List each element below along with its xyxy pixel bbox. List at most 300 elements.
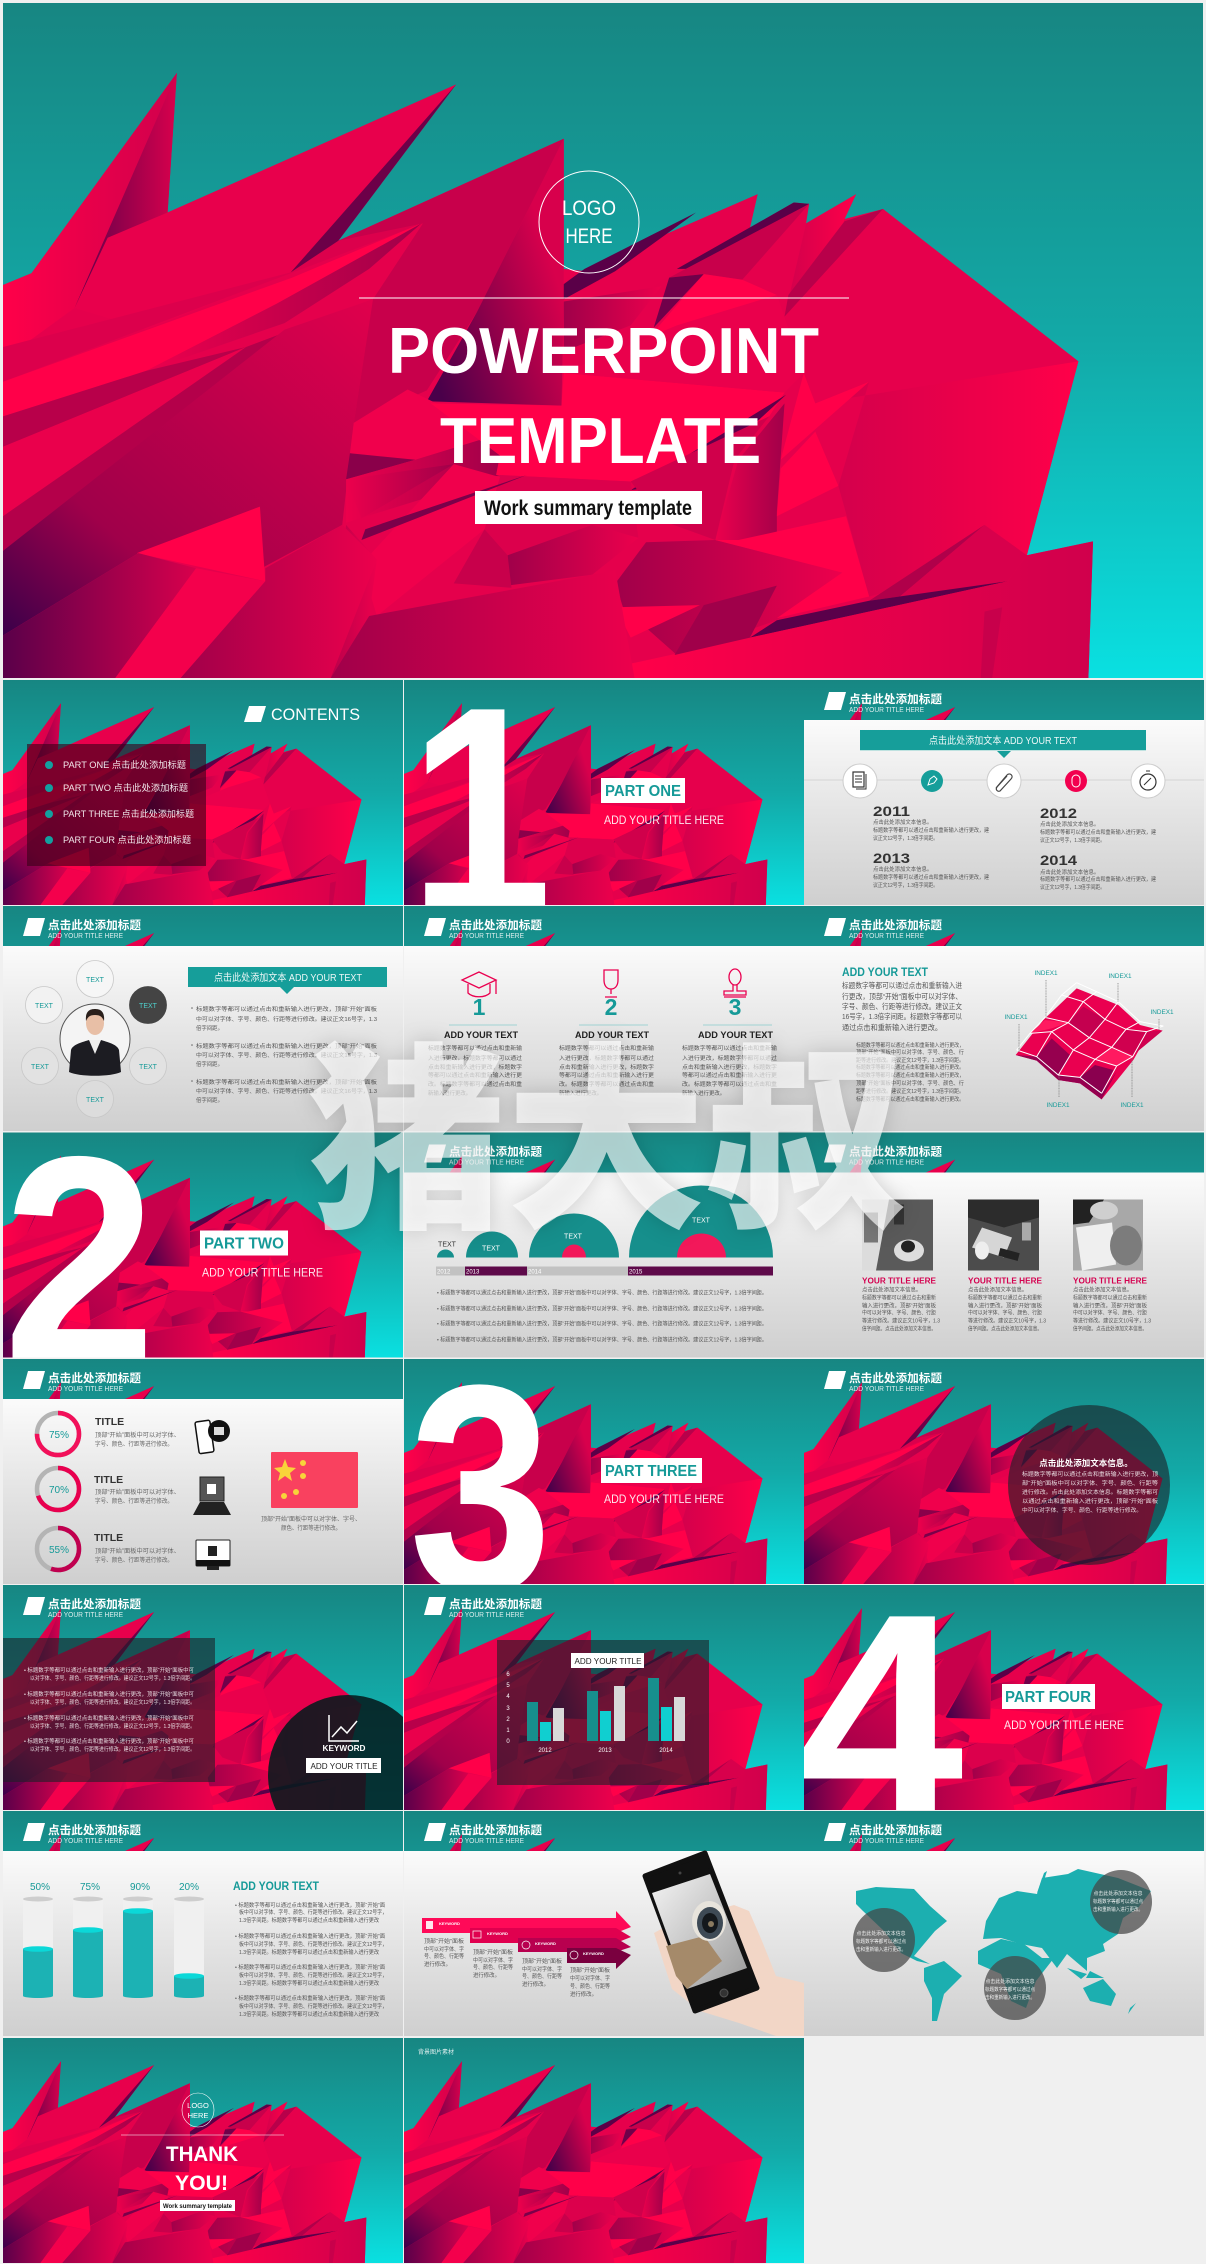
header: 点击此处添加标题	[48, 1371, 142, 1385]
photo: desk	[968, 1200, 1039, 1270]
column 1: 等都可以通过点击和重新输入进行更	[428, 1071, 523, 1079]
radar index labels: INDEX1	[1034, 970, 1058, 977]
thank you title: YOU!	[175, 2172, 228, 2195]
bar chart: 2013	[598, 1748, 612, 1754]
radar index labels: INDEX1	[1120, 1102, 1144, 1109]
photo captions: YOUR TITLE HERE	[862, 1276, 937, 1286]
icon: trophy	[604, 970, 618, 997]
step captions: 顶部“开始”面板	[522, 1957, 563, 1965]
item 1 text: 顶部“开始”面板中可以对字体、	[95, 1431, 180, 1439]
numbers: 2	[605, 994, 617, 1020]
header: ADD YOUR TITLE HERE	[449, 1838, 524, 1845]
bullet text: 顶部“开始”面板中可以对字体、字号、颜色、行	[856, 1048, 965, 1056]
2014: 标题数字等都可以通过点击和重新输入进行更改，建	[1040, 875, 1157, 883]
bullet text: 标题数字等都可以通过点击和重新输入进行更改，	[856, 1071, 964, 1079]
slide: circle text	[804, 1359, 1204, 1584]
dark circle with text: 点击此处添加文本信息。	[1039, 1458, 1133, 1468]
flag image	[271, 1452, 358, 1508]
part four label: ADD YOUR TITLE HERE	[1004, 1718, 1124, 1732]
dark circle with text: 标题数字等都可以通过点击和重新输入进行更改，顶	[1022, 1470, 1159, 1478]
map callouts: 击和重新输入进行更改。	[985, 1994, 1035, 2001]
2014: 2014	[1040, 852, 1077, 868]
column text 1: 中可以对字体、字号、颜色、行距	[862, 1308, 937, 1316]
cylinder 90%	[123, 1882, 153, 1998]
slide: contents	[3, 680, 403, 905]
column 2: 标题数字等都可以通过点击和重新输	[559, 1044, 655, 1052]
translucent text panel: 以对字体、字号、颜色、行距等进行修改。建议正文12号字，1.3倍字间距。	[30, 1722, 195, 1730]
header: 点击此处添加标题	[48, 918, 142, 932]
step captions: 号、颜色、行距等	[473, 1963, 514, 1971]
2013	[873, 850, 990, 889]
header	[824, 692, 943, 714]
number 1: 1	[409, 645, 552, 976]
column 2	[559, 1025, 655, 1097]
text block: 板中可以对字体、字号、颜色、行距等进行修改。建议正文12号字，	[239, 1971, 387, 1979]
text block: 1.3倍字间距。标题数字等都可以通过点击和重新输入进行更改	[239, 2010, 380, 2018]
part four label: PART FOUR	[1005, 1689, 1091, 1706]
slide: cylinders	[3, 1811, 403, 2036]
text block: 1.3倍字间距。标题数字等都可以通过点击和重新输入进行更改	[239, 1979, 380, 1987]
slide: phone and arrow	[404, 1811, 804, 2036]
logo circle: HERE	[188, 2111, 208, 2120]
column text 1: 点击此处添加文本信息。	[862, 1286, 921, 1294]
bullet lines: • 标题数字等都可以通过点击和重新输入进行更改，顶部“开始”面板中可以对字体、字号、颜色、行距等进行修改。建议正文12号字，1.3倍字间距。	[437, 1320, 767, 1328]
dome chart: TEXT	[482, 1246, 501, 1252]
bullet lines	[437, 1288, 767, 1344]
item 2 text: 顶部“开始”面板中可以对字体、	[95, 1488, 180, 1496]
logo circle	[182, 2093, 214, 2127]
column 1	[428, 1025, 523, 1097]
bar chart: 1	[506, 1728, 510, 1734]
chart panel: ADD YOUR TITLE	[574, 1657, 642, 1666]
bullet text: 顶部“开始”面板中可以对字体、字号、颜色、行	[856, 1079, 965, 1087]
contents list panel	[27, 744, 206, 866]
text block: • 标题数字等都可以通过点击和重新输入进行更改，顶部“开始”面	[235, 1994, 386, 2002]
2013: 议正文12号字，1.3倍字间距。	[873, 881, 938, 889]
text block: 板中可以对字体、字号、颜色、行距等进行修改。建议正文12号字，	[239, 1940, 387, 1948]
column text 3	[1073, 1286, 1151, 1332]
callout bar	[860, 730, 1146, 758]
paragraphs	[191, 1005, 378, 1104]
header: ADD YOUR TITLE HERE	[48, 933, 123, 940]
2013: 2013	[873, 850, 910, 866]
header: 点击此处添加标题	[449, 1144, 543, 1158]
bullet text	[856, 1041, 965, 1103]
bar chart: 3	[506, 1706, 510, 1712]
cover title	[359, 298, 849, 477]
part two label	[200, 1230, 323, 1280]
numbers	[473, 994, 741, 1020]
header: ADD YOUR TITLE HERE	[849, 707, 924, 714]
watermark: 猪大叔	[306, 980, 906, 1270]
item 2 text: TITLE	[94, 1474, 123, 1486]
paragraphs: 中可以对字体、字号、颜色、行距等进行修改。建议正文16号字，1.3	[196, 1087, 377, 1095]
translucent text panel: • 标题数字等都可以通过点击和重新输入进行更改，顶部“开始”面板中可	[24, 1714, 195, 1722]
column 2: 等都可以通过点击和重新输入进行更	[559, 1071, 655, 1079]
cylinder 50%: 50%	[30, 1882, 50, 1893]
map callouts: 点击此处添加文本信息	[986, 1978, 1034, 1985]
2014	[1040, 852, 1157, 891]
column 1: 新输入进行更改。	[428, 1089, 471, 1097]
bar chart: 4	[506, 1694, 510, 1700]
radar index labels: INDEX1	[1004, 1014, 1028, 1021]
column 3: 新输入进行更改。	[682, 1089, 725, 1097]
2013: 标题数字等都可以通过点击和重新输入进行更改，建	[873, 873, 990, 881]
header: 点击此处添加标题	[849, 692, 943, 706]
logo circle	[539, 171, 639, 273]
map callouts	[853, 1870, 1152, 2020]
bullet text: 标题数字等都可以通过点击和重新输入进行更改。	[856, 1095, 964, 1103]
step captions	[424, 1937, 611, 1998]
map callouts: 标题数字等都可以通过点	[1093, 1898, 1143, 1905]
surface chart	[1016, 983, 1163, 1099]
part three label	[601, 1458, 724, 1506]
column text 2: 倍字间距。点击此处添加文本信息。	[968, 1324, 1042, 1332]
text block: 板中可以对字体、字号、颜色、行距等进行修改。建议正文12号字，	[239, 2002, 387, 2010]
part two label: PART TWO	[204, 1236, 284, 1252]
2012: 2012	[1040, 805, 1077, 821]
photo captions: YOUR TITLE HERE	[1073, 1276, 1148, 1286]
text block: • 标题数字等都可以通过点击和重新输入进行更改，顶部“开始”面	[235, 1901, 386, 1909]
subtitle tag: Work summary template	[163, 2203, 232, 2210]
part three label: ADD YOUR TITLE HERE	[604, 1492, 724, 1506]
column 3: ADD YOUR TEXT	[698, 1030, 773, 1041]
numbers: 3	[729, 994, 741, 1020]
column 1: 改。标题数字等都可以通过点击和重	[428, 1080, 523, 1088]
flag caption	[261, 1515, 361, 1532]
column 1: 入进行更改，标题数字等都可以通过	[428, 1054, 523, 1062]
bar chart: 2012	[538, 1748, 552, 1754]
column 1: ADD YOUR TEXT	[444, 1030, 518, 1041]
part one label: PART ONE	[605, 783, 681, 800]
bar chart	[506, 1672, 685, 1754]
column text 3: 输入进行更改，顶部“开始”面板	[1073, 1302, 1148, 1310]
hand holding phone	[645, 1853, 804, 2036]
number 3: 3	[409, 1323, 552, 1654]
2014: 点击此处添加文本信息。	[1040, 868, 1099, 876]
translucent text panel	[3, 1638, 215, 1782]
column 3	[682, 1025, 778, 1097]
slide: thank you	[3, 2038, 403, 2263]
column 3: 改。标题数字等都可以通过点击和重	[682, 1080, 778, 1088]
cylinder 20%: 20%	[179, 1882, 199, 1893]
radar index labels: INDEX1	[1108, 973, 1132, 980]
header: 点击此处添加标题	[849, 1144, 943, 1158]
header	[23, 1823, 142, 1845]
callout bar	[188, 967, 387, 994]
step captions: 进行修改。	[424, 1960, 451, 1968]
header	[824, 918, 943, 940]
bar chart: 0	[506, 1739, 510, 1745]
dark circle with text	[1008, 1405, 1170, 1565]
header: ADD YOUR TITLE HERE	[849, 1160, 924, 1166]
contents list panel: PART ONE 点击此处添加标题	[63, 759, 186, 770]
bar chart: 2	[506, 1717, 510, 1723]
dome chart	[437, 1186, 773, 1258]
contents list panel: PART THREE 点击此处添加标题	[63, 808, 194, 819]
radar index labels: INDEX1	[1150, 1009, 1174, 1016]
map callouts: 标题数字等都可以通过点	[856, 1938, 906, 1945]
thank you title: THANK	[166, 2143, 238, 2166]
thank you title	[121, 2135, 284, 2195]
column 2: ADD YOUR TEXT	[575, 1030, 649, 1041]
number 2: 2	[3, 1094, 156, 1426]
intro text: 16号字，1.3倍字间距。标题数字等都可以	[842, 1012, 963, 1021]
part one label	[601, 778, 724, 827]
text bubbles: TEXT	[86, 1097, 105, 1104]
slide: background material	[404, 2038, 804, 2263]
icon: phone and chat	[195, 1420, 230, 1454]
bullet text: 距等进行修改。建议正文12号字，1.3倍字间距。	[856, 1056, 964, 1064]
text bubbles: TEXT	[31, 1064, 50, 1071]
2011: 点击此处添加文本信息。	[873, 818, 932, 826]
text bubbles: TEXT	[86, 977, 105, 984]
dome chart: TEXT	[692, 1218, 711, 1224]
header	[424, 918, 543, 940]
2011	[873, 803, 990, 842]
world map	[856, 1869, 1151, 2021]
step captions: 中可以对字体、字	[570, 1974, 610, 1982]
header: ADD YOUR TITLE HERE	[449, 933, 524, 940]
bar chart: 5	[506, 1683, 510, 1689]
photo captions: YOUR TITLE HERE	[968, 1276, 1043, 1286]
slide: keyword text panel	[3, 1585, 403, 1810]
icon: person stamp	[724, 969, 746, 997]
2011: 议正文12号字，1.3倍字间距。	[873, 834, 938, 842]
slide: bar chart	[404, 1585, 804, 1810]
column text 3: 标题数字等都可以通过点击和重新	[1073, 1294, 1148, 1302]
radar index labels	[1004, 970, 1174, 1109]
header	[23, 918, 142, 940]
paragraphs: 中可以对字体、字号、颜色、行距等进行修改。建议正文16号字，1.3	[196, 1015, 377, 1023]
intro text: 通过点击和重新输入进行更改。	[842, 1023, 942, 1032]
dark circle with text: 以通过点击和重新输入进行更改，顶部“开始”面板	[1022, 1497, 1159, 1505]
text block: 板中可以对字体、字号、颜色、行距等进行修改。建议正文12号字，	[239, 1908, 387, 1916]
radar index labels: INDEX1	[1046, 1102, 1070, 1109]
column 2: 入进行更改，标题数字等都可以通过	[559, 1054, 655, 1062]
column text 1: 倍字间距。点击此处添加文本信息。	[862, 1324, 936, 1332]
column 3: 点击和重新输入进行更改，标题数字	[682, 1063, 777, 1071]
contents list panel: PART TWO 点击此处添加标题	[63, 782, 188, 793]
ring 55%	[37, 1528, 79, 1570]
bullet lines: • 标题数字等都可以通过点击和重新输入进行更改，顶部“开始”面板中可以对字体、字号、颜色、行距等进行修改。建议正文12号字，1.3倍字间距。	[437, 1336, 767, 1344]
column 2: 点击和重新输入进行更改，标题数字	[559, 1063, 654, 1071]
column text 1: 等进行修改。建议正文10号字，1.3	[862, 1316, 940, 1324]
paragraphs: 倍字间距。	[196, 1096, 223, 1104]
bullet text: 标题数字等都可以通过点击和重新输入进行更改。	[856, 1063, 964, 1071]
column text 1: 标题数字等都可以通过点击和重新	[862, 1294, 937, 1302]
dome chart: TEXT	[564, 1234, 583, 1240]
text bubbles	[22, 960, 166, 1118]
timeline bar: 2015	[629, 1270, 643, 1276]
ring 70%	[37, 1468, 79, 1510]
column 3: 标题数字等都可以通过点击和重新输	[682, 1044, 778, 1052]
header: 点击此处添加标题	[48, 1823, 142, 1837]
bullet lines: • 标题数字等都可以通过点击和重新输入进行更改，顶部“开始”面板中可以对字体、字号、颜色、行距等进行修改。建议正文12号字，1.3倍字间距。	[437, 1288, 767, 1296]
dome chart: TEXT	[438, 1242, 457, 1248]
keyword circle: KEYWORD	[322, 1744, 366, 1753]
header	[424, 1144, 543, 1166]
column text 2: 标题数字等都可以通过点击和重新	[968, 1294, 1043, 1302]
subtitle tag	[160, 2200, 235, 2211]
header: ADD YOUR TITLE HERE	[449, 1160, 524, 1166]
bar chart: 2014	[659, 1748, 673, 1754]
cylinder 75%: 75%	[80, 1882, 100, 1893]
text block: ADD YOUR TEXT	[233, 1881, 319, 1893]
cover subtitle	[475, 491, 702, 524]
translucent text panel: 以对字体、字号、颜色、行距等进行修改。建议正文12号字，1.3倍字间距。	[30, 1745, 195, 1753]
column text 2: 等进行修改。建议正文10号字，1.3	[968, 1316, 1046, 1324]
ring 75%	[37, 1413, 79, 1455]
slide: progress rings	[3, 1359, 403, 1584]
cylinder 90%: 90%	[130, 1882, 150, 1893]
step captions: 中可以对字体、字	[473, 1956, 513, 1964]
paragraphs: 标题数字等都可以通过点击和重新输入进行更改，顶部“开始”面板	[196, 1078, 378, 1086]
translucent text panel: 以对字体、字号、颜色、行距等进行修改。建议正文12号字，1.3倍字间距。	[30, 1698, 195, 1706]
numbers: 1	[473, 994, 486, 1020]
part three label: PART THREE	[605, 1463, 697, 1480]
portrait photo	[60, 1004, 130, 1076]
logo circle: LOGO	[187, 2101, 209, 2110]
dark circle with text: 进行修改。点击此处添加文本信息。标题数字等都可	[1022, 1488, 1159, 1496]
cover subtitle: Work summary template	[484, 497, 692, 520]
column 1: 点击和重新输入进行更改，标题数字	[428, 1063, 522, 1071]
text block: 1.3倍字间距。标题数字等都可以通过点击和重新输入进行更改	[239, 1916, 380, 1924]
column text 3: 点击此处添加文本信息。	[1073, 1286, 1132, 1294]
step captions: 号、颜色、行距等	[424, 1952, 465, 1960]
cylinder 50%	[23, 1882, 53, 1998]
2012: 议正文12号字，1.3倍字间距。	[1040, 836, 1105, 844]
step captions: 中可以对字体、字	[522, 1965, 562, 1973]
item 1 text: 字号、颜色、行距等进行修改。	[95, 1440, 173, 1448]
slide: portrait and bubbles	[3, 906, 403, 1131]
icon: laptop	[193, 1477, 231, 1515]
step captions: 进行修改。	[570, 1990, 597, 1998]
column text 3: 等进行修改。建议正文10号字，1.3	[1073, 1316, 1151, 1324]
header	[824, 1144, 943, 1166]
step arrow	[422, 1911, 631, 1969]
step captions: 顶部“开始”面板	[570, 1966, 611, 1974]
ring 70%: 70%	[49, 1485, 69, 1496]
text block: • 标题数字等都可以通过点击和重新输入进行更改，顶部“开始”面	[235, 1932, 386, 1940]
icon row	[804, 764, 1204, 798]
header: 点击此处添加标题	[449, 918, 543, 932]
dark circle with text: 中可以对字体、字号、颜色、行距等进行修改。	[1022, 1506, 1142, 1514]
header: ADD YOUR TITLE HERE	[849, 1386, 924, 1393]
column text 1: 输入进行更改，顶部“开始”面板	[862, 1302, 937, 1310]
text bubbles: TEXT	[35, 1003, 54, 1010]
slide: three icons	[404, 906, 804, 1131]
contents heading: CONTENTS	[271, 705, 360, 724]
ring 55%: 55%	[49, 1545, 69, 1556]
map callouts: 点击此处添加文本信息	[856, 1930, 906, 1937]
slide: domes timeline	[404, 1132, 804, 1358]
item 1 text: TITLE	[95, 1416, 124, 1428]
header: 点击此处添加标题	[849, 918, 943, 932]
item 3 text: 字号、颜色、行距等进行修改。	[95, 1556, 173, 1564]
timeline bar	[436, 1266, 773, 1276]
step captions: 号、颜色、行距等	[570, 1982, 611, 1990]
item 3 text: TITLE	[94, 1532, 123, 1544]
header: 点击此处添加标题	[449, 1597, 543, 1611]
header: ADD YOUR TITLE HERE	[849, 933, 924, 940]
bullet text: 标题数字等都可以通过点击和重新输入进行更改，	[856, 1041, 964, 1049]
translucent text panel: • 标题数字等都可以通过点击和重新输入进行更改，顶部“开始”面板中可	[24, 1737, 195, 1745]
photo: laptop and coffee	[862, 1200, 933, 1270]
2011: 标题数字等都可以通过点击和重新输入进行更改，建	[873, 826, 990, 834]
header: ADD YOUR TITLE HERE	[449, 1612, 524, 1619]
2012: 点击此处添加文本信息。	[1040, 820, 1099, 828]
map callouts: 击和重新输入进行更改。	[856, 1946, 906, 1953]
column 3: 等都可以通过点击和重新输入进行更	[682, 1071, 778, 1079]
flag caption: 颜色、行距等进行修改。	[281, 1524, 341, 1532]
header	[23, 1371, 142, 1393]
2011: 2011	[873, 803, 910, 819]
item 2 text	[94, 1474, 180, 1505]
translucent text panel: 以对字体、字号、颜色、行距等进行修改。建议正文12号字，1.3倍字间距。	[30, 1674, 195, 1682]
photo captions	[862, 1276, 1148, 1286]
header	[824, 1371, 943, 1393]
slide: world map	[804, 1811, 1204, 2036]
step arrow: KEYWORD	[439, 1921, 460, 1926]
part one label: ADD YOUR TITLE HERE	[604, 813, 724, 827]
intro text: 行更改，顶部“开始”面板中可以对字体、	[842, 992, 962, 1001]
text block: • 标题数字等都可以通过点击和重新输入进行更改，顶部“开始”面	[235, 1963, 386, 1971]
column text 3: 倍字间距。点击此处添加文本信息。	[1073, 1324, 1147, 1332]
callout bar: 点击此处添加文本 ADD YOUR TEXT	[929, 734, 1077, 747]
column 2: 新输入进行更改。	[559, 1089, 602, 1097]
item 1 text	[95, 1416, 180, 1448]
header: 点击此处添加标题	[48, 1597, 142, 1611]
column text 2: 输入进行更改，顶部“开始”面板	[968, 1302, 1043, 1310]
translucent text panel: • 标题数字等都可以通过点击和重新输入进行更改，顶部“开始”面板中可	[24, 1690, 195, 1698]
step captions: 号、颜色、行距等	[522, 1972, 563, 1980]
flag caption: 顶部“开始”面板中可以对字体、字号、	[261, 1515, 361, 1523]
2012: 标题数字等都可以通过点击和重新输入进行更改，建	[1040, 828, 1157, 836]
map callouts: 点击此处添加文本信息	[1094, 1890, 1142, 1897]
step arrow: KEYWORD	[583, 1951, 604, 1956]
slide: part three	[404, 1323, 804, 1654]
step captions: 进行修改。	[522, 1980, 549, 1988]
keyword circle	[268, 1695, 428, 1855]
column text 2: 点击此处添加文本信息。	[968, 1286, 1027, 1294]
text block	[233, 1881, 387, 2018]
slide: cover	[3, 3, 1203, 678]
paragraphs: 标题数字等都可以通过点击和重新输入进行更改，顶部“开始”面板	[196, 1005, 378, 1013]
2013: 点击此处添加文本信息。	[873, 865, 932, 873]
item 3 text	[94, 1532, 180, 1564]
map callouts: 击和重新输入进行更改。	[1093, 1906, 1143, 1913]
translucent text panel: • 标题数字等都可以通过点击和重新输入进行更改，顶部“开始”面板中可	[24, 1666, 195, 1674]
text block: 1.3倍字间距。标题数字等都可以通过点击和重新输入进行更改	[239, 1948, 380, 1956]
timeline bar: 2012	[437, 1270, 451, 1276]
logo circle: LOGO	[562, 197, 616, 220]
background note: 背景图片素材	[418, 2048, 454, 2056]
text bubbles: TEXT	[139, 1064, 158, 1071]
column 1: 标题数字等都可以通过点击和重新输	[428, 1044, 523, 1052]
column text 2: 中可以对字体、字号、颜色、行距	[968, 1308, 1043, 1316]
paragraphs: 倍字间距。	[196, 1060, 223, 1068]
intro text: ADD YOUR TEXT	[842, 965, 929, 979]
column text 3: 中可以对字体、字号、颜色、行距	[1073, 1308, 1148, 1316]
header: ADD YOUR TITLE HERE	[48, 1386, 123, 1393]
chart panel	[497, 1640, 709, 1785]
part four label	[1002, 1684, 1124, 1732]
part two label: ADD YOUR TITLE HERE	[202, 1266, 323, 1280]
header: 点击此处添加标题	[449, 1823, 543, 1837]
step arrow: KEYWORD	[487, 1931, 508, 1936]
cylinder 20%	[174, 1882, 204, 1998]
